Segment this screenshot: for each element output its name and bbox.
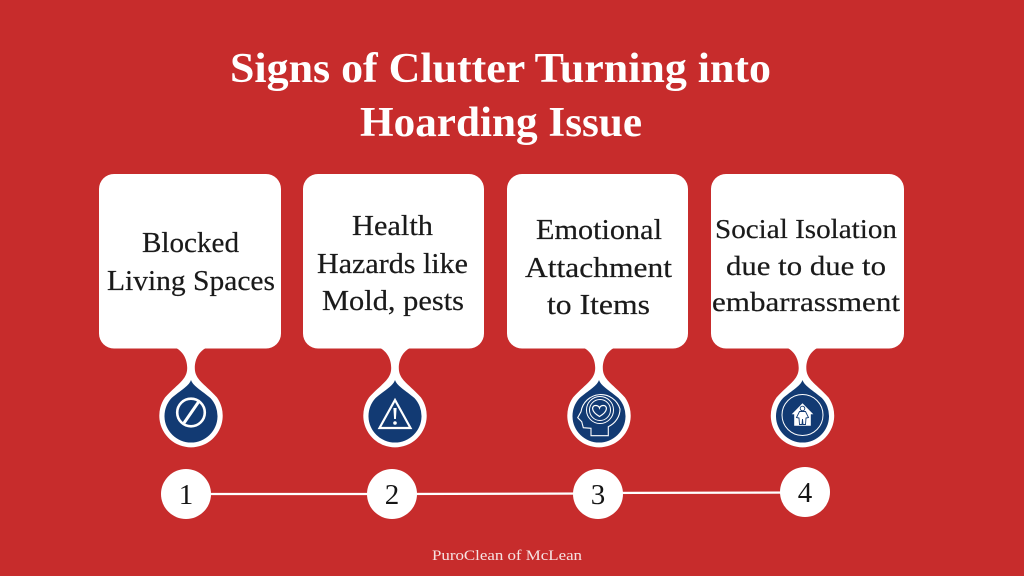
card text: health hazards <box>317 211 468 317</box>
card text: social isolation <box>712 214 901 317</box>
card text: blocked living spaces <box>107 228 275 297</box>
timeline connector <box>186 492 805 494</box>
card text: emotional attachment: Attachment <box>525 253 672 284</box>
step 3 marker <box>573 469 623 519</box>
card text: emotional attachment: Emotional <box>536 215 662 246</box>
card text: health hazards: Mold, pests <box>322 286 464 317</box>
step 1 marker <box>161 469 211 519</box>
icon: person in house drop <box>771 348 834 447</box>
card text: emotional attachment <box>525 215 672 321</box>
step 1 marker: 1 <box>179 479 193 511</box>
panel: emotional attachment <box>507 174 688 348</box>
icon: warning drop <box>363 348 427 447</box>
step 4 marker <box>780 467 830 517</box>
step 2 marker: 2 <box>385 479 399 511</box>
step 2 marker <box>367 469 417 519</box>
card text: health hazards: Hazards like <box>317 249 468 280</box>
card text: social isolation: due to due to <box>726 251 886 281</box>
card text: social isolation: embarrassment <box>712 287 901 317</box>
icon: no entry drop <box>159 348 223 447</box>
title: Signs of Clutter Turning into <box>230 46 771 92</box>
panel: blocked living spaces <box>99 174 281 348</box>
title: Hoarding Issue <box>360 100 642 146</box>
title <box>230 46 771 146</box>
card text: blocked living spaces: Blocked <box>142 228 239 259</box>
step 3 marker: 3 <box>591 479 605 511</box>
icon: head with heart drop <box>567 348 631 447</box>
panel: social isolation <box>711 174 904 348</box>
card text: emotional attachment: to Items <box>547 290 650 321</box>
card text: social isolation: Social Isolation <box>715 214 898 244</box>
footer credit: PuroClean of McLean <box>432 548 583 564</box>
card text: blocked living spaces: Living Spaces <box>107 266 275 297</box>
step 4 marker: 4 <box>798 477 813 509</box>
card text: health hazards: Health <box>352 211 433 242</box>
panel: health hazards <box>303 174 484 348</box>
